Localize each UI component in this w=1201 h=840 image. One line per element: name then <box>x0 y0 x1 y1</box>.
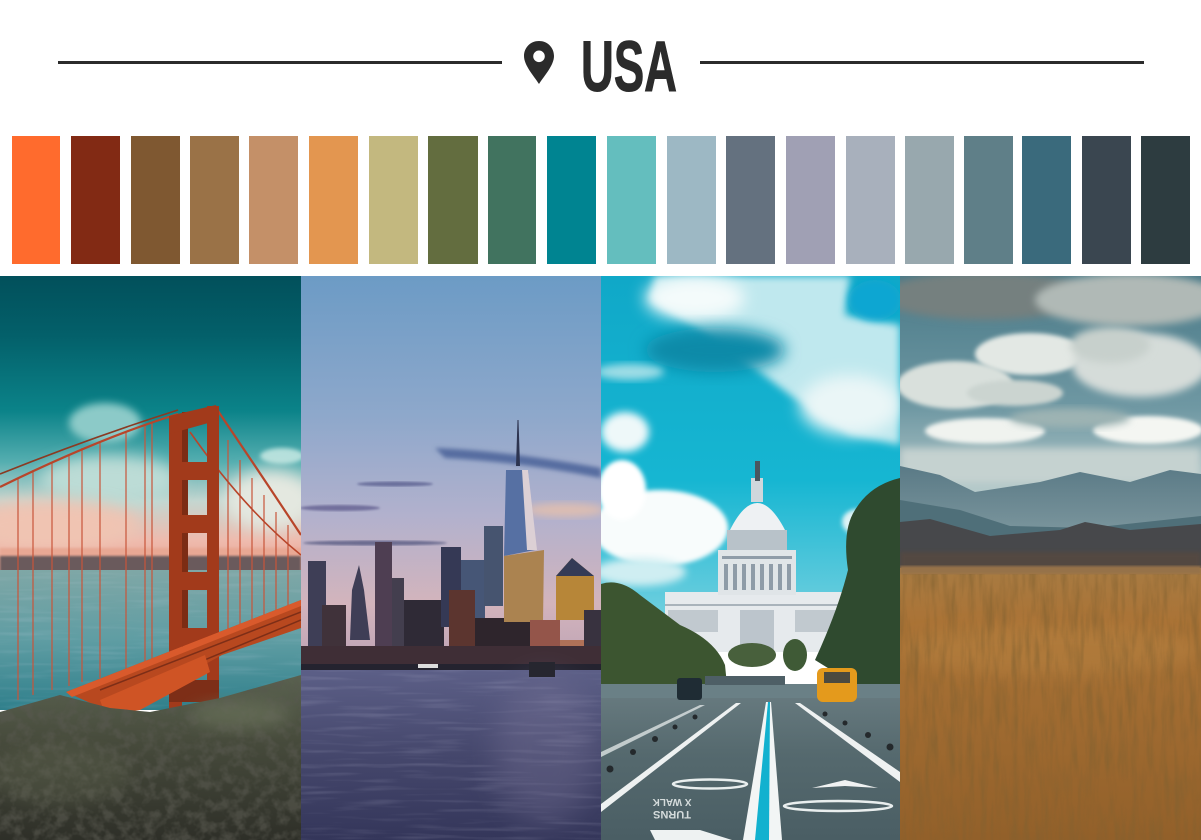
bridge tower <box>169 405 219 708</box>
icon: location pin <box>524 41 554 84</box>
heading: USA <box>581 28 677 107</box>
city skyline <box>0 556 301 572</box>
deck <box>66 600 301 712</box>
divider line right <box>700 61 1144 64</box>
capitol <box>665 592 850 652</box>
colour palette swatches <box>12 136 1190 264</box>
vehicles <box>817 668 857 702</box>
hill <box>0 675 301 840</box>
street scene <box>601 684 900 698</box>
dark foothills <box>900 519 1201 572</box>
photo: US Capitol: TURNS <box>653 808 691 820</box>
photo: US Capitol: X WALK <box>652 796 691 807</box>
photo: Golden Gate Bridge <box>0 276 315 840</box>
road <box>601 698 900 840</box>
trees <box>601 582 726 684</box>
divider line left <box>58 61 502 64</box>
mountains <box>900 466 1201 528</box>
title: USA with location pin <box>58 28 1144 107</box>
main cables <box>0 408 301 555</box>
One World Trade <box>516 420 520 466</box>
field <box>900 568 1201 840</box>
photo: landscape with mountains and field <box>880 272 1201 840</box>
suspender cables <box>18 422 288 700</box>
photo: US Capitol <box>592 276 901 840</box>
skyscrapers <box>308 561 326 646</box>
photo: New York skyline <box>300 276 605 840</box>
